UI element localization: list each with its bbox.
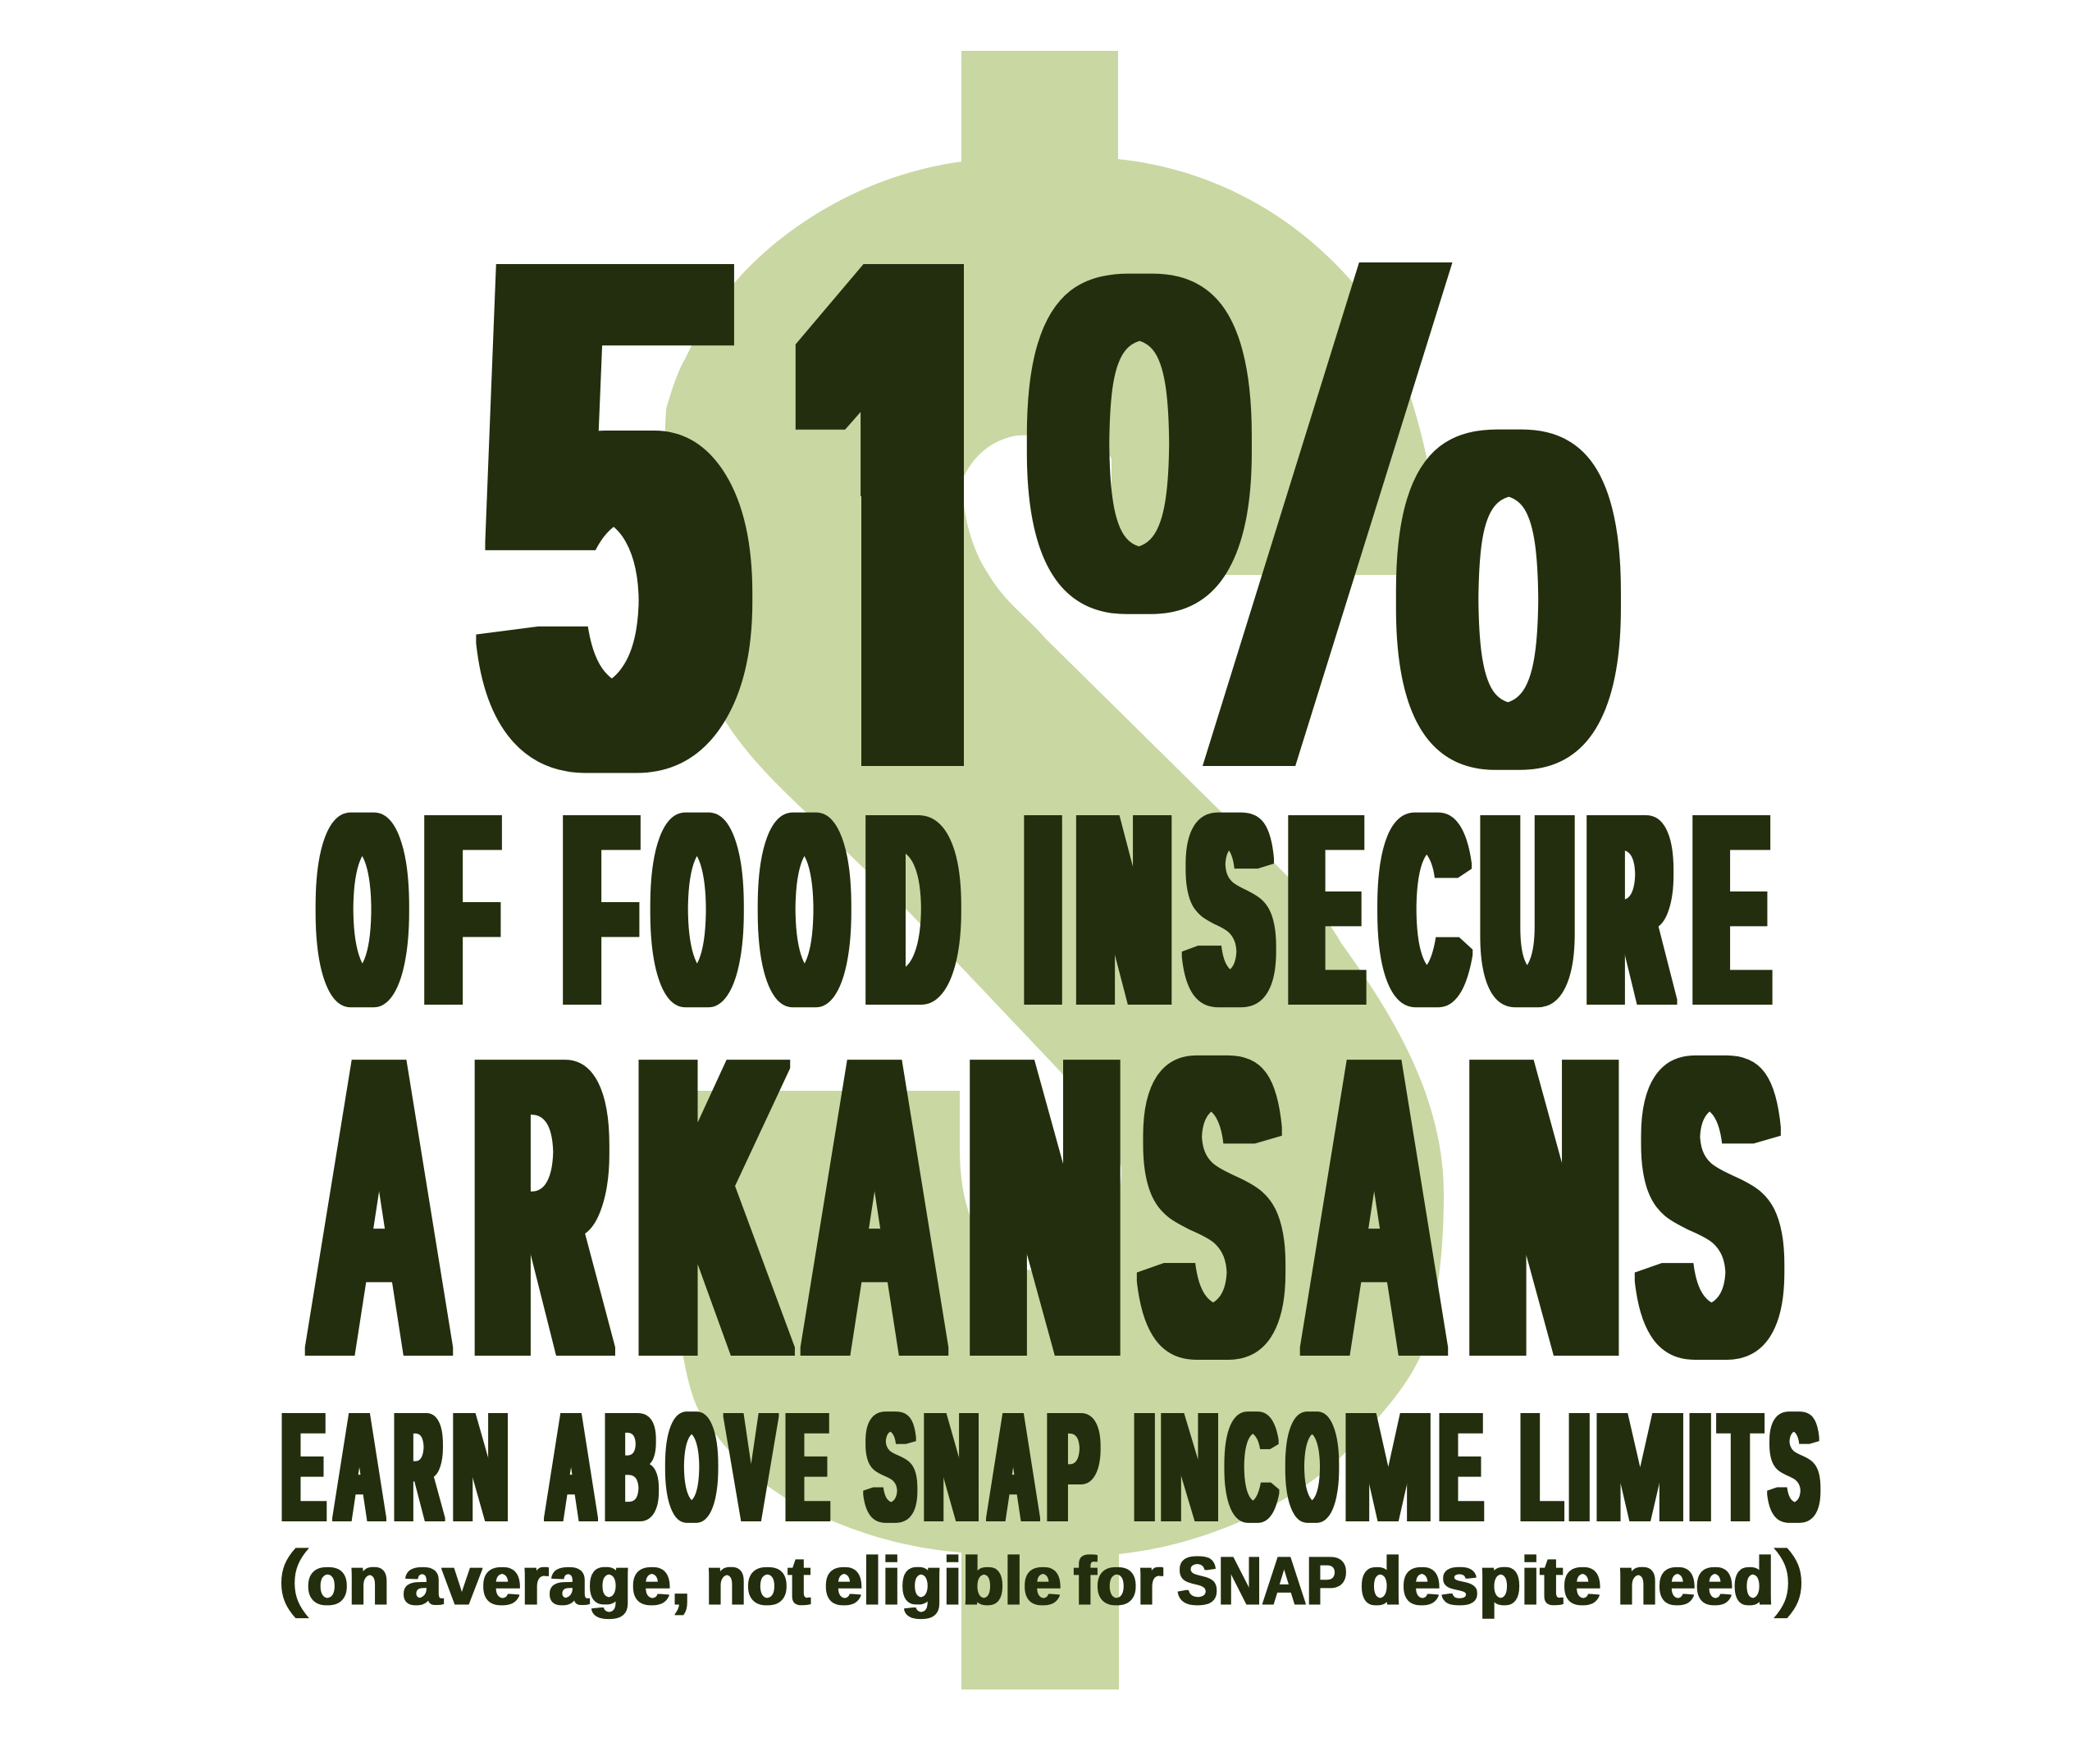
- text line: on average, not eligible for SNAP despite need: average,: [403, 1543, 691, 1619]
- text line: OF FOOD INSECURE: [323, 760, 1764, 1060]
- headline statistic: 51%: 0: [1391, 344, 1626, 855]
- text line: ARKANSANS: A: [807, 973, 942, 1441]
- text line: EARN ABOVE SNAP INCOME LIMITS: A: [989, 1383, 1037, 1553]
- text line: EARN ABOVE SNAP INCOME LIMITS: E: [282, 1383, 324, 1553]
- text line: OF FOOD INSECURE: N: [1080, 760, 1168, 1060]
- text line: EARN ABOVE SNAP INCOME LIMITS: O: [1288, 1383, 1337, 1553]
- text line: on average, not eligible for SNAP despite need: ): [1774, 1535, 1806, 1619]
- text line: OF FOOD INSECURE: E: [1293, 760, 1358, 1060]
- text line: EARN ABOVE SNAP INCOME LIMITS: N: [1161, 1383, 1219, 1553]
- text line: OF FOOD INSECURE: C: [1385, 760, 1464, 1060]
- text line: EARN ABOVE SNAP INCOME LIMITS: P: [1047, 1383, 1098, 1553]
- headline statistic: 51%: 5: [486, 113, 741, 914]
- headline statistic: 51%: %: [1171, 99, 1484, 924]
- text line: on average, not eligible for SNAP despite need: [276, 1535, 1806, 1619]
- headline statistic: 51%: [476, 262, 1621, 773]
- text line: EARN ABOVE SNAP INCOME LIMITS: S: [866, 1383, 915, 1553]
- text line: EARN ABOVE SNAP INCOME LIMITS: E: [1440, 1383, 1481, 1553]
- text line: ARKANSANS: A: [1307, 973, 1441, 1441]
- text line: on average, not eligible for SNAP despite need: eligible: [824, 1543, 1061, 1619]
- text line: OF FOOD INSECURE: O: [658, 760, 737, 1060]
- text line: ARKANSANS: R: [479, 973, 603, 1441]
- text line: EARN ABOVE SNAP INCOME LIMITS: E: [786, 1383, 828, 1553]
- text line: OF FOOD INSECURE: D: [870, 760, 955, 1060]
- text line: on average, not eligible for SNAP despite need: SNAP: [1177, 1543, 1347, 1619]
- text line: OF FOOD INSECURE: F: [567, 760, 633, 1060]
- text line: OF FOOD INSECURE: O: [765, 760, 844, 1060]
- text line: EARN ABOVE SNAP INCOME LIMITS: R: [395, 1383, 441, 1553]
- text line: OF FOOD INSECURE: U: [1485, 760, 1571, 1060]
- text line: EARN ABOVE SNAP INCOME LIMITS: N: [924, 1383, 979, 1553]
- text line: EARN ABOVE SNAP INCOME LIMITS: I: [1689, 1383, 1712, 1553]
- text line: EARN ABOVE SNAP INCOME LIMITS: M: [1595, 1383, 1686, 1553]
- text line: OF FOOD INSECURE: I: [1029, 760, 1057, 1060]
- text line: EARN ABOVE SNAP INCOME LIMITS: C: [1226, 1383, 1276, 1553]
- headline statistic: 51%: 1: [793, 113, 1012, 914]
- headline statistic: 51%: 0: [1022, 188, 1257, 699]
- text line: EARN ABOVE SNAP INCOME LIMITS: V: [728, 1383, 774, 1553]
- text line: EARN ABOVE SNAP INCOME LIMITS: I: [1134, 1383, 1155, 1553]
- text line: ARKANSANS: S: [1147, 973, 1277, 1441]
- text line: EARN ABOVE SNAP INCOME LIMITS: L: [1521, 1383, 1562, 1553]
- text line: ARKANSANS: N: [1472, 973, 1617, 1441]
- text line: EARN ABOVE SNAP INCOME LIMITS: N: [453, 1383, 508, 1553]
- text line: EARN ABOVE SNAP INCOME LIMITS: I: [1568, 1383, 1590, 1553]
- text line: OF FOOD INSECURE: S: [1189, 760, 1269, 1060]
- text line: OF FOOD INSECURE: O: [323, 760, 402, 1060]
- text line: on average, not eligible for SNAP despite need: need: [1617, 1543, 1774, 1619]
- text line: ARKANSANS: S: [1645, 973, 1777, 1441]
- text line: EARN ABOVE SNAP INCOME LIMITS: M: [1344, 1383, 1433, 1553]
- text line: on average, not eligible for SNAP despite need: on: [307, 1543, 390, 1619]
- text line: on average, not eligible for SNAP despite need: (: [276, 1535, 309, 1619]
- text line: ARKANSANS: A: [312, 973, 446, 1441]
- icon: dollar sign background: [664, 51, 1444, 1689]
- text line: on average, not eligible for SNAP despite need: despite: [1360, 1543, 1601, 1619]
- text line: OF FOOD INSECURE: R: [1591, 760, 1668, 1060]
- text line: EARN ABOVE SNAP INCOME LIMITS: A: [336, 1383, 383, 1553]
- text line: EARN ABOVE SNAP INCOME LIMITS: T: [1720, 1383, 1760, 1553]
- text line: OF FOOD INSECURE: E: [1697, 760, 1764, 1060]
- text line: EARN ABOVE SNAP INCOME LIMITS: O: [668, 1383, 716, 1553]
- text line: on average, not eligible for SNAP despite need: not: [705, 1543, 810, 1619]
- text line: ARKANSANS: K: [641, 973, 781, 1441]
- text line: EARN ABOVE SNAP INCOME LIMITS: [282, 1383, 1819, 1553]
- text line: OF FOOD INSECURE: F: [428, 760, 495, 1060]
- text line: ARKANSANS: [312, 973, 1777, 1441]
- text line: ARKANSANS: N: [972, 973, 1118, 1441]
- text line: EARN ABOVE SNAP INCOME LIMITS: S: [1770, 1383, 1819, 1553]
- text line: EARN ABOVE SNAP INCOME LIMITS: A: [547, 1383, 595, 1553]
- text line: EARN ABOVE SNAP INCOME LIMITS: B: [605, 1383, 657, 1553]
- text line: on average, not eligible for SNAP despite need: for: [1074, 1543, 1163, 1619]
